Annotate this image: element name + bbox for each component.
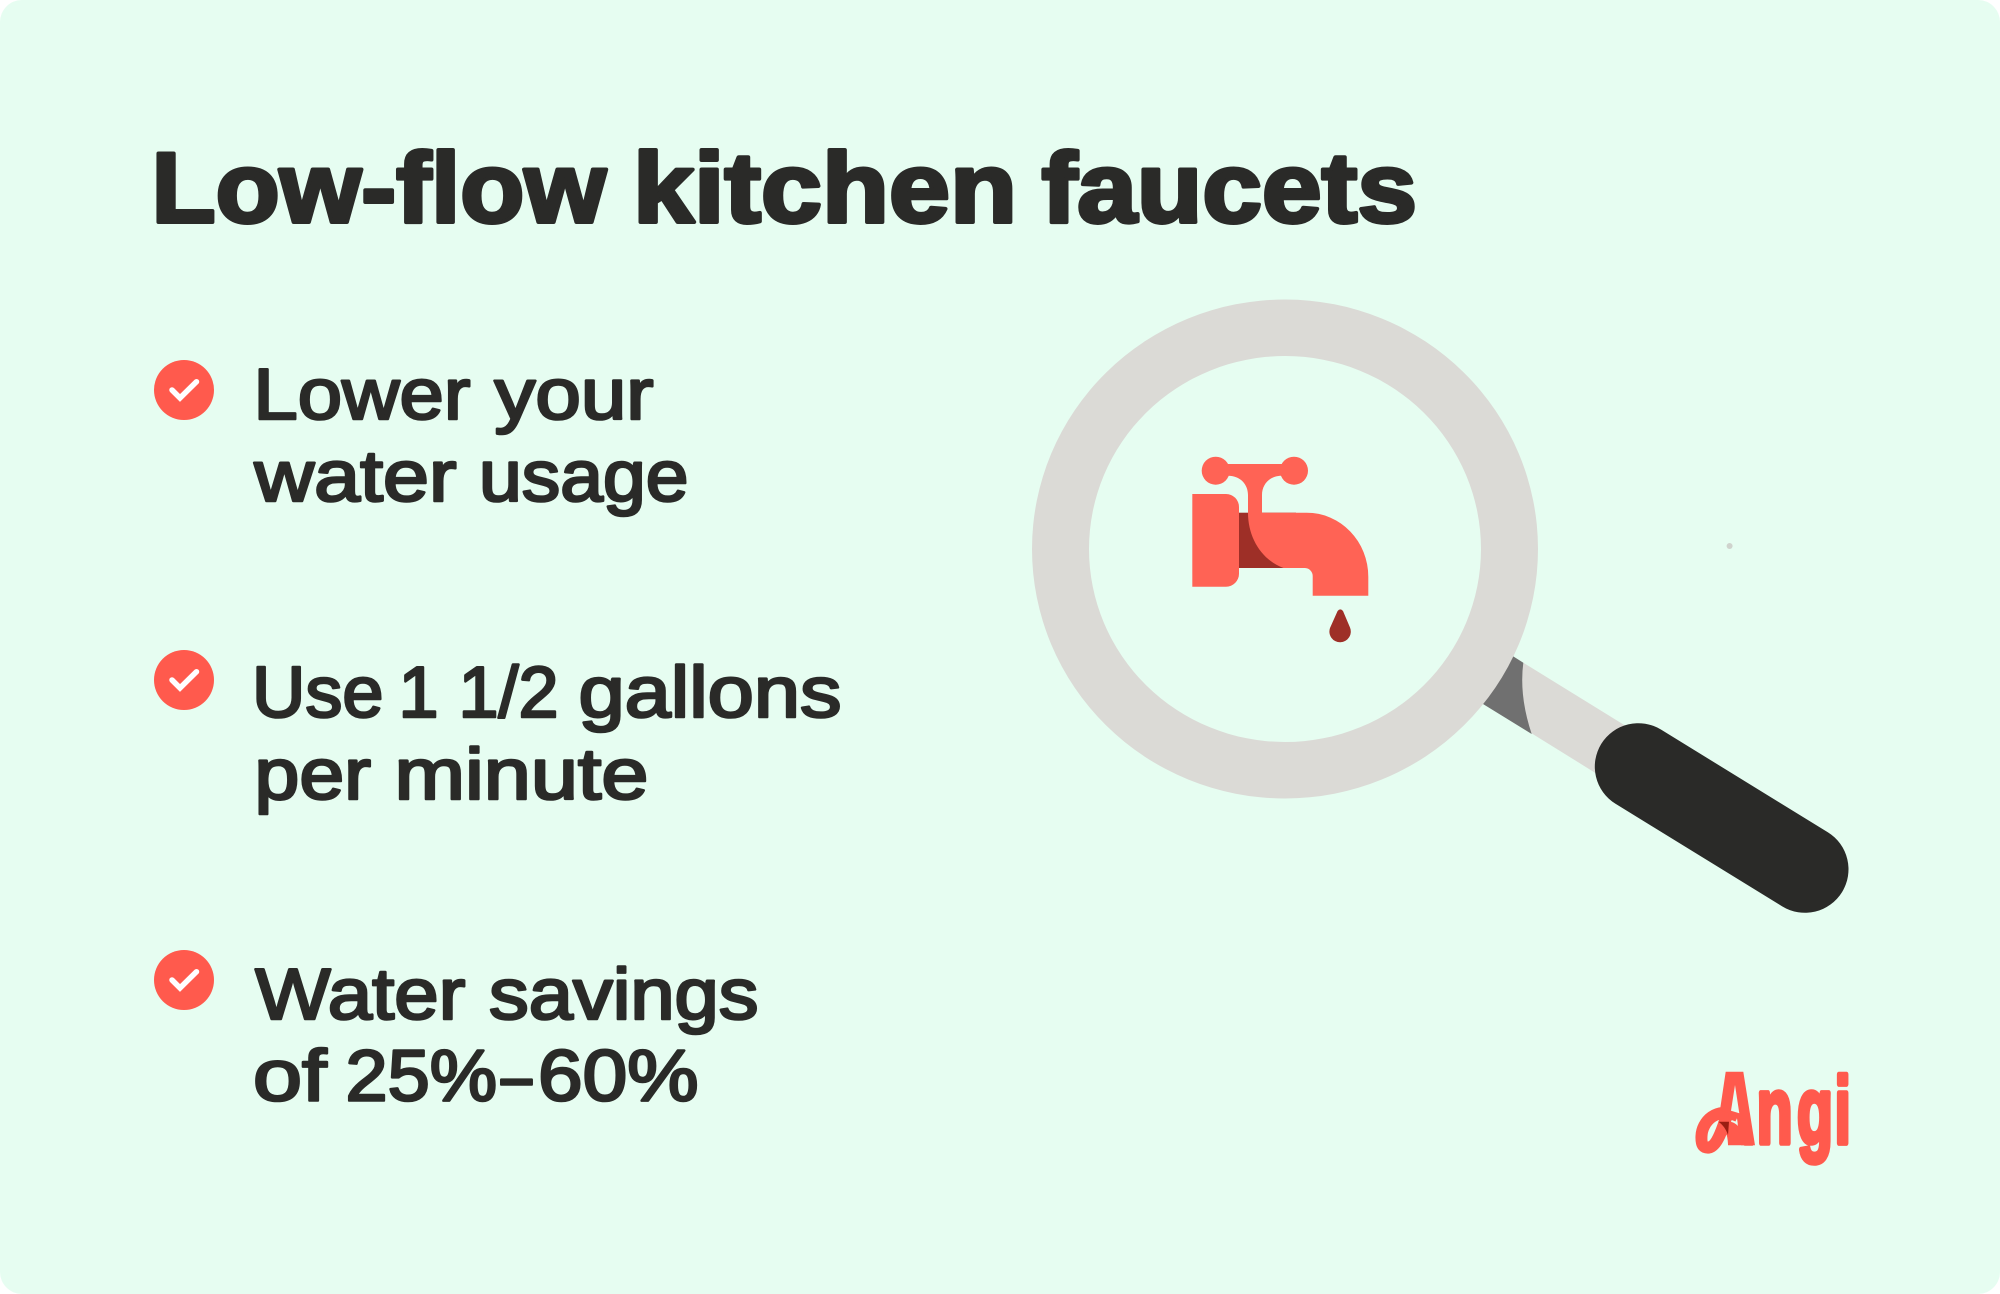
faucet spout and stem	[1226, 464, 1368, 596]
logo letter A: A	[1716, 1059, 1754, 1164]
text: lower your water usage: water	[253, 437, 456, 517]
text: use 1 1/2 gallons per minute: gallons	[578, 653, 842, 733]
decorative dot	[1727, 543, 1733, 549]
icon: check badge 2	[154, 650, 214, 710]
text: use 1 1/2 gallons per minute: 1 1/2	[398, 653, 558, 733]
logo swash	[1701, 1113, 1745, 1148]
text: use 1 1/2 gallons per minute	[252, 653, 842, 815]
text: water savings of 25%-60%: 25%	[346, 1036, 497, 1116]
logo: Angi	[1701, 1056, 1851, 1164]
faucet shadow pipe	[1236, 513, 1296, 568]
title: kitchen	[633, 132, 1017, 243]
text: water savings of 25%-60%: 60%	[538, 1036, 698, 1116]
logo letter A	[1720, 1072, 1755, 1146]
text: use 1 1/2 gallons per minute: Use	[252, 653, 384, 733]
text: lower your water usage: Lower	[253, 355, 470, 435]
magnifier shaft shadow	[1470, 648, 1532, 734]
text: water savings of 25%-60%: –	[501, 1036, 533, 1116]
logo letters ngi: ngi	[1757, 1056, 1851, 1163]
faucet handle right	[1280, 457, 1308, 485]
text: water savings of 25%-60%: savings	[489, 955, 758, 1035]
magnifier handle	[1638, 767, 1805, 869]
icon: magnifying glass	[1032, 300, 1805, 869]
magnifier shaft	[1470, 636, 1660, 773]
text: use 1 1/2 gallons per minute: minute	[394, 735, 648, 815]
text: lower your water usage	[253, 355, 689, 517]
title: faucets	[1042, 132, 1417, 243]
text: use 1 1/2 gallons per minute: per	[254, 735, 371, 815]
text: lower your water usage: your	[494, 355, 654, 435]
icon: check badge 1	[154, 360, 214, 420]
text: lower your water usage: usage	[479, 437, 688, 517]
faucet wall plate	[1192, 494, 1239, 587]
title: Low-flow	[152, 132, 607, 243]
benefit list	[154, 355, 842, 1116]
text: water savings of 25%-60%: Water	[255, 955, 465, 1035]
faucet handle left	[1202, 457, 1230, 485]
text: water savings of 25%-60%	[253, 955, 758, 1116]
water drop	[1329, 609, 1351, 642]
text: water savings of 25%-60%: of	[253, 1036, 328, 1116]
magnifier ring	[1032, 300, 1538, 798]
icon: check badge 3	[154, 950, 214, 1010]
icon: faucet	[1192, 457, 1368, 642]
